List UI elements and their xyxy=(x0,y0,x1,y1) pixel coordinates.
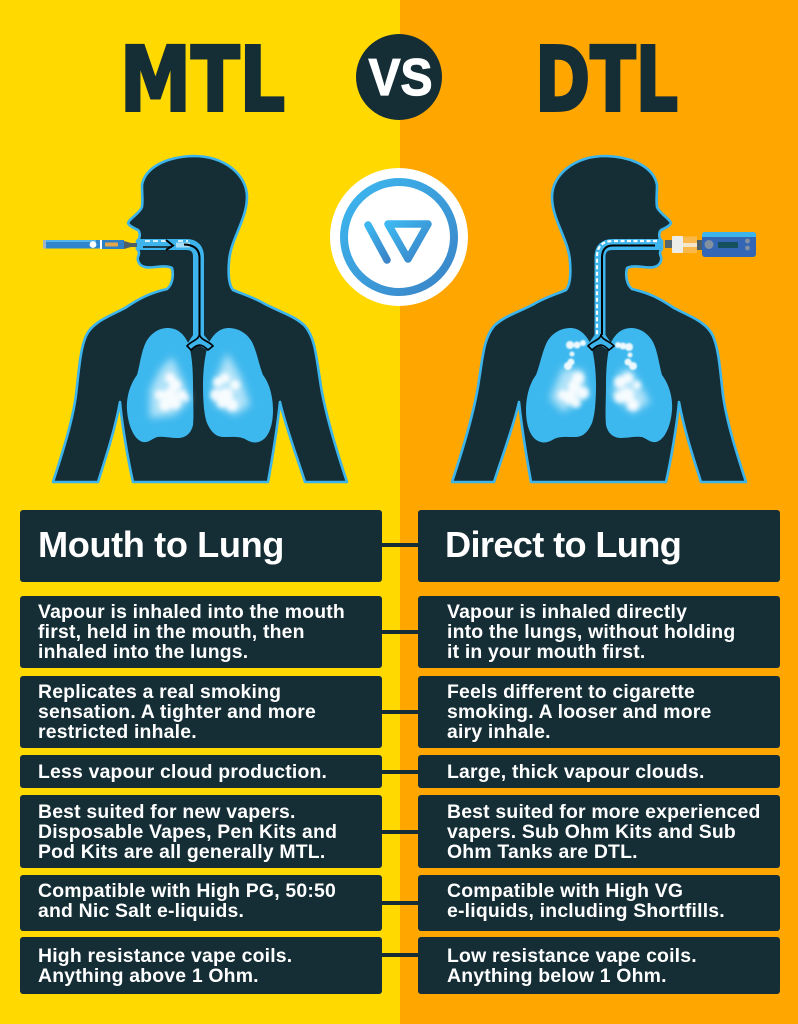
logo badge xyxy=(330,168,468,306)
text block: DTL suited for: vapers. Sub Ohm Kits and Sub xyxy=(447,821,736,843)
text block: DTL suited for: Best suited for more experienced xyxy=(447,801,761,823)
silhouette xyxy=(452,156,746,482)
figure: MTL body and lungs xyxy=(43,156,347,482)
text block: DTL e-liquids: e-liquids, including Shortfills. xyxy=(447,900,725,922)
text block: DTL sensation: airy inhale. xyxy=(447,721,551,743)
text block: MTL inhale: Vapour is inhaled into the mouth xyxy=(38,601,345,623)
text block: MTL inhale: first, held in the mouth, then xyxy=(38,621,305,643)
text block: MTL sensation: sensation. A tighter and more xyxy=(38,701,316,723)
text block: MTL sensation xyxy=(20,676,382,748)
text block: MTL sensation: Replicates a real smoking xyxy=(38,681,281,703)
lungs xyxy=(526,328,672,442)
box mod vape device xyxy=(665,232,756,257)
panel heading: Mouth to Lung: Mouth to Lung xyxy=(38,524,284,565)
heading: DTL: DTL xyxy=(535,28,678,132)
text block: MTL coils xyxy=(20,937,382,994)
yellow background panel xyxy=(0,0,400,1024)
lungs xyxy=(127,328,273,442)
text block: DTL sensation: Feels different to cigarette xyxy=(447,681,695,703)
text block: DTL coils xyxy=(418,937,780,994)
text block: DTL sensation xyxy=(418,676,780,748)
VS badge: VS xyxy=(368,49,432,107)
airway xyxy=(587,241,662,350)
connector: row 6 xyxy=(382,953,418,957)
text block: MTL inhale xyxy=(20,596,382,668)
VS badge xyxy=(356,34,442,120)
text block: MTL inhale: inhaled into the lungs. xyxy=(38,641,248,663)
text block: DTL inhale xyxy=(418,596,780,668)
orange background panel xyxy=(400,0,798,1024)
text block: DTL e-liquids: Compatible with High VG xyxy=(447,880,683,902)
text block: MTL suited for: Best suited for new vapers. xyxy=(38,801,296,823)
illustration layer xyxy=(43,28,756,484)
text block: MTL e-liquids: Compatible with High PG, 50:50 xyxy=(38,880,336,902)
vapour clouds in lungs xyxy=(150,353,250,418)
connector: heading row xyxy=(382,543,418,547)
text block: DTL inhale: it in your mouth first. xyxy=(447,641,646,663)
vapour clouds in lungs xyxy=(550,340,650,413)
text block: DTL coils: Anything below 1 Ohm. xyxy=(447,965,667,987)
text block: MTL sensation: restricted inhale. xyxy=(38,721,197,743)
text block: DTL vapour production xyxy=(418,755,780,788)
panel heading: Direct to Lung xyxy=(418,510,780,582)
connector: row 2 xyxy=(382,710,418,714)
silhouette xyxy=(53,156,347,482)
text block: DTL vapour production: Large, thick vapour clouds. xyxy=(447,761,705,783)
text block: MTL suited for xyxy=(20,795,382,868)
pen vape device xyxy=(43,240,137,249)
text block: DTL suited for xyxy=(418,795,780,868)
text block: MTL vapour production: Less vapour cloud production. xyxy=(38,761,327,783)
text block: MTL vapour production xyxy=(20,755,382,788)
connector: row 5 xyxy=(382,901,418,905)
text block: DTL inhale: into the lungs, without holding xyxy=(447,621,735,643)
connector: row 4 xyxy=(382,830,418,834)
text block: MTL suited for: Disposable Vapes, Pen Kits and xyxy=(38,821,337,843)
text block: DTL suited for: Ohm Tanks are DTL. xyxy=(447,841,638,863)
text block: DTL e-liquids xyxy=(418,875,780,931)
connector: row 3 xyxy=(382,770,418,774)
text block: DTL sensation: smoking. A looser and more xyxy=(447,701,712,723)
text block: MTL coils: Anything above 1 Ohm. xyxy=(38,965,259,987)
heading: MTL: MTL xyxy=(120,28,285,132)
panel heading: Direct to Lung: Direct to Lung xyxy=(445,524,681,565)
panel heading: Mouth to Lung xyxy=(20,510,382,582)
text block: MTL suited for: Pod Kits are all generally MTL. xyxy=(38,841,325,863)
connector: row 1 xyxy=(382,630,418,634)
text block: DTL coils: Low resistance vape coils. xyxy=(447,945,697,967)
text block: MTL e-liquids: and Nic Salt e-liquids. xyxy=(38,900,244,922)
text block: MTL e-liquids xyxy=(20,875,382,931)
figure: DTL body and lungs xyxy=(452,156,756,482)
text block: DTL inhale: Vapour is inhaled directly xyxy=(447,601,687,623)
airway xyxy=(137,240,213,350)
text block: MTL coils: High resistance vape coils. xyxy=(38,945,292,967)
